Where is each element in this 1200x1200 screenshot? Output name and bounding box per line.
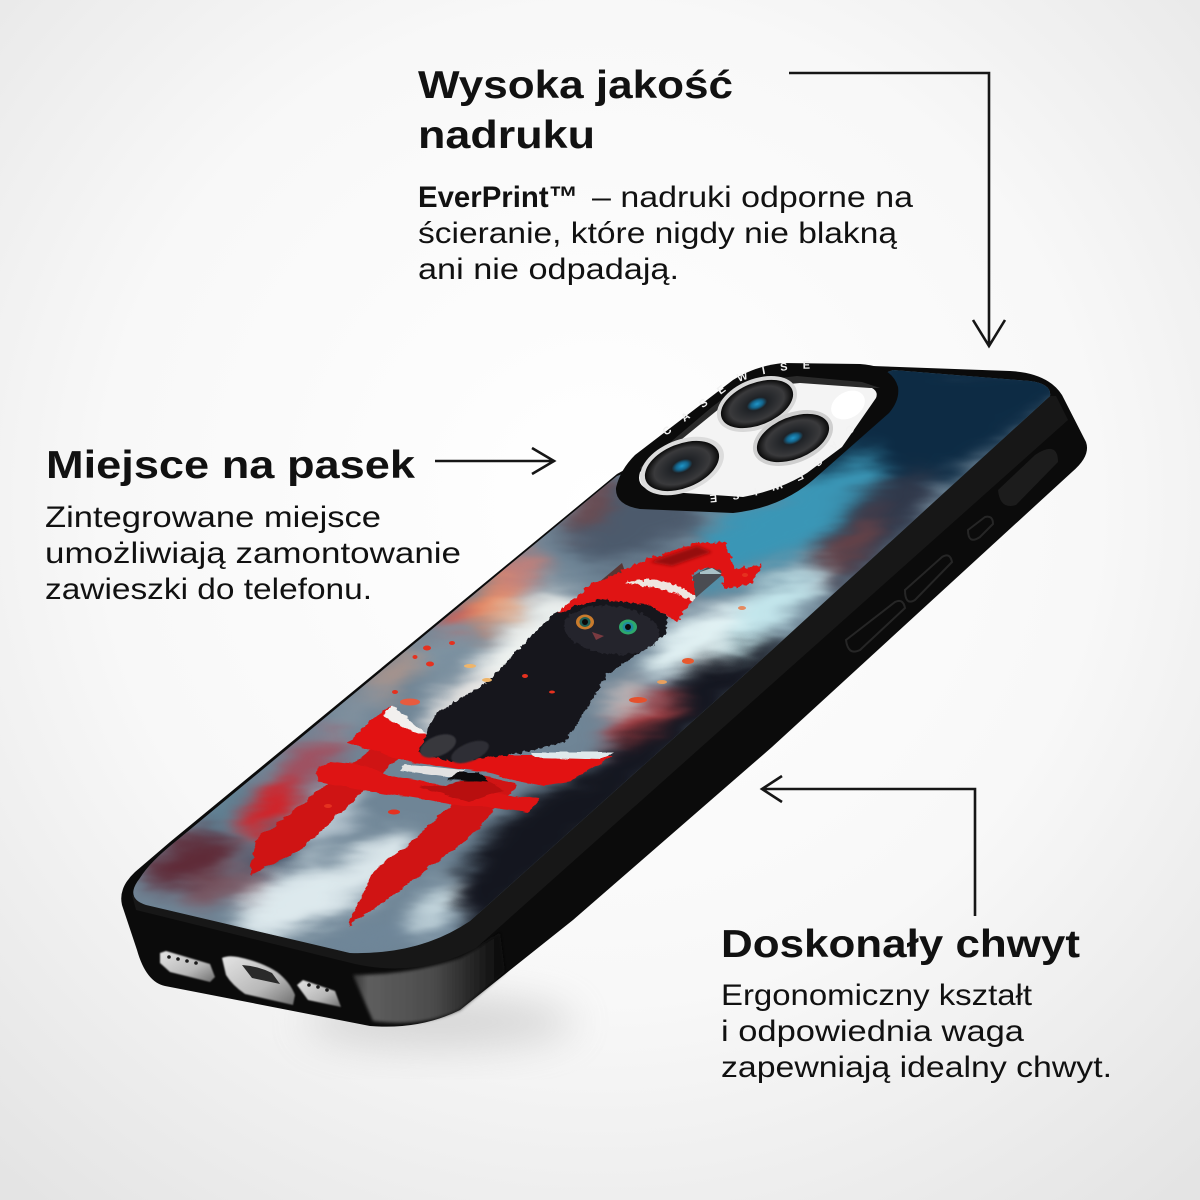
body: perfect grip: i odpowiednia waga — [721, 1015, 1024, 1048]
left speaker — [160, 951, 215, 982]
arrow to case surface — [789, 73, 1005, 346]
lens top — [709, 365, 805, 443]
camera window — [639, 378, 877, 497]
kitten paws — [419, 734, 489, 764]
body: print quality: EverPrint™ — [418, 181, 578, 214]
right speaker — [297, 980, 341, 1007]
charging port — [222, 956, 295, 1005]
heading: print quality: Wysoka jakość — [418, 64, 733, 107]
callout: perfect grip — [721, 776, 1112, 1084]
camera module — [616, 362, 898, 513]
arrow to case side — [762, 776, 975, 916]
santa hat — [557, 542, 762, 622]
phone shadow — [305, 996, 575, 1048]
torii gate — [250, 705, 615, 926]
body: perfect grip: Ergonomiczny kształt — [721, 979, 1033, 1012]
body: strap slot: umożliwiają zamontowanie — [45, 537, 461, 570]
arrow to strap slot — [435, 448, 554, 474]
kitten eyes — [576, 614, 637, 634]
casewise ring text: CASEWISE — [625, 362, 810, 478]
heading: print quality: nadruku — [418, 114, 595, 157]
lens right — [745, 399, 841, 477]
body: strap slot: Zintegrowane miejsce — [45, 501, 381, 534]
side buttons — [846, 449, 1058, 652]
body: print quality: ścieranie, które nigdy nie blakną — [418, 217, 897, 250]
kitten nose — [592, 632, 604, 640]
black kitten — [417, 563, 668, 768]
kitten ear — [600, 563, 624, 581]
bottom corner highlight — [353, 932, 505, 1023]
case body — [121, 364, 1087, 1027]
printed back artwork — [133, 370, 1050, 954]
body: print quality: – nadruki odporne na — [592, 181, 913, 214]
phone case illustration — [121, 362, 1088, 1027]
body: strap slot: zawieszki do telefonu. — [45, 573, 372, 606]
heading: perfect grip: Doskonały chwyt — [721, 923, 1080, 966]
paint flecks — [324, 573, 748, 814]
side bevel — [132, 396, 1068, 968]
bottom ports — [160, 951, 341, 1007]
heading: strap slot: Miejsce na pasek — [46, 444, 415, 487]
camera module: CASEWISE — [710, 430, 854, 502]
sky and cloud washes — [133, 350, 1080, 964]
lens left — [631, 425, 733, 507]
callout: strap slot — [45, 444, 554, 606]
body: perfect grip: zapewniają idealny chwyt. — [721, 1051, 1112, 1084]
callout: print quality — [418, 64, 1005, 346]
body: print quality: ani nie odpadają. — [418, 253, 679, 286]
